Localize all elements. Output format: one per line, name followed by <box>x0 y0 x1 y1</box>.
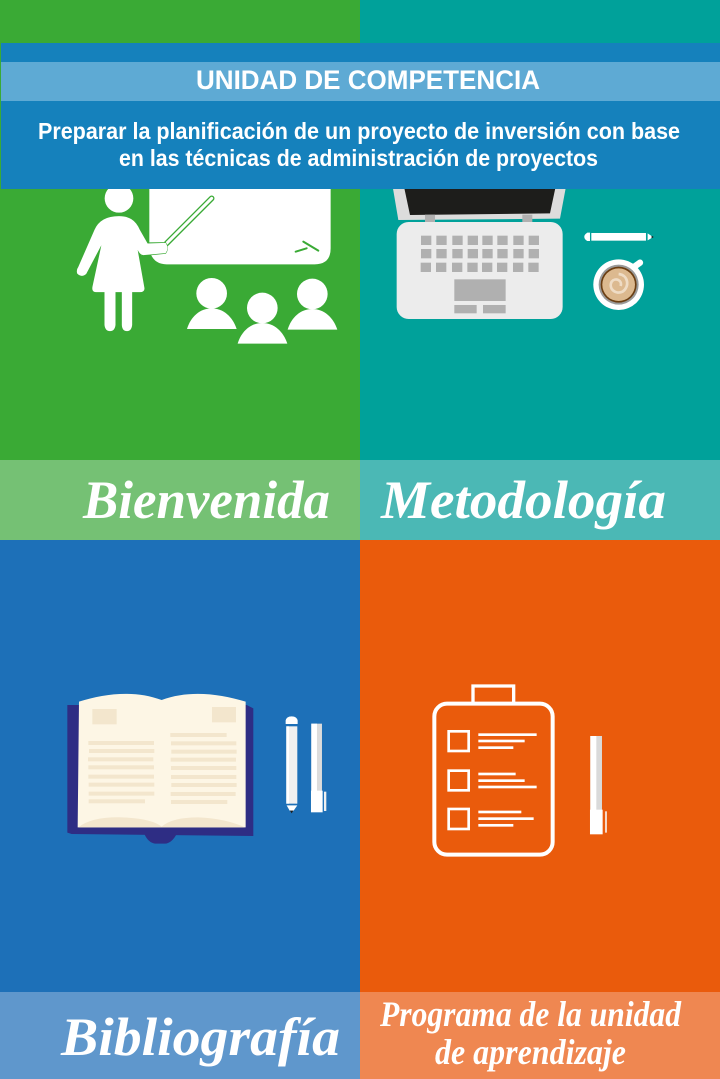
subtitle: Preparar la planificación de un proyecto de inversión con base <box>38 118 680 144</box>
strip: Bibliografía label <box>0 992 360 1079</box>
strip: Bibliografía label: Bibliografía <box>60 1007 340 1067</box>
strip: Bienvenida label: Bienvenida <box>82 470 330 530</box>
subtitle: en las técnicas de administración de proyectos <box>119 145 598 171</box>
icon: laptop, pen and coffee <box>393 187 654 319</box>
strip: Programa label <box>360 992 720 1079</box>
strip: Programa label: de aprendizaje <box>435 1032 626 1072</box>
icon: open book and pens <box>67 694 326 844</box>
icon: checklist clipboard and marker <box>434 686 607 855</box>
icon: teacher at whiteboard with students <box>77 180 337 344</box>
panel: Programa de la unidad de aprendizaje <box>360 540 720 1079</box>
strip: Metodología label <box>360 460 720 540</box>
header banner <box>1 43 720 189</box>
panel: Bienvenida <box>0 0 360 540</box>
strip: Metodología label: Metodología <box>380 470 666 530</box>
strip: Programa label: Programa de la unidad <box>379 994 682 1034</box>
panel: Metodología <box>360 0 720 540</box>
strip: Bienvenida label <box>0 460 360 540</box>
title: UNIDAD DE COMPETENCIA <box>196 65 540 95</box>
panel: Bibliografía <box>0 540 360 1079</box>
subtitle <box>38 118 680 171</box>
